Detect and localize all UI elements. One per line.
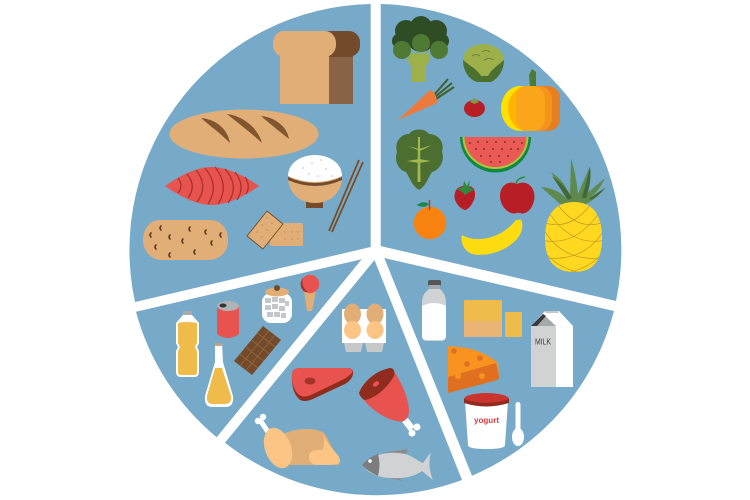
label: yogurt: yogurt — [474, 415, 499, 425]
icon: oil bottle — [176, 311, 199, 377]
icon: cheese wedge — [448, 346, 499, 393]
icon: fish — [362, 449, 433, 481]
label: milk: MILK — [535, 338, 552, 346]
icon: chocolate bar — [234, 326, 281, 375]
icon: baguette — [169, 110, 319, 158]
icon: ham leg — [359, 368, 420, 436]
icon: yogurt cup — [464, 393, 509, 449]
icon: pineapple — [540, 158, 606, 274]
icon: milk carton — [531, 311, 573, 387]
icon: crackers — [247, 211, 303, 249]
panel: sweets and oils segment — [136, 259, 362, 437]
food pie chart infographic — [129, 4, 622, 496]
panel: grains segment — [129, 4, 371, 302]
panel: vegetables and fruit segment — [381, 4, 621, 301]
icon: strawberry — [454, 180, 475, 210]
icon: watermelon slice — [460, 137, 531, 172]
icon: egg carton — [342, 304, 386, 352]
icon: rice bowl — [288, 155, 342, 208]
icon: roast chicken — [255, 414, 340, 472]
icon: cabbage — [463, 44, 504, 82]
icon: milk bottle — [422, 280, 446, 341]
icon: tomato — [464, 98, 485, 117]
icon: ice cream cone — [301, 275, 319, 311]
icon: broccoli — [392, 16, 449, 82]
icon: oil flask — [205, 343, 233, 407]
icon: bread loaf — [273, 31, 360, 104]
icon: sugar jar — [262, 285, 292, 323]
panel: protein segment — [225, 260, 462, 495]
icon: carrot — [398, 79, 454, 120]
icon: pumpkin — [501, 69, 560, 131]
panel: dairy segment — [384, 258, 614, 476]
icon: orange — [414, 200, 446, 239]
icon: steak — [292, 368, 353, 401]
icon: sweet potato — [165, 167, 259, 205]
icon: kale leaf — [396, 130, 443, 190]
icon: soda can — [217, 301, 239, 338]
icon: chopsticks — [329, 160, 363, 232]
icon: cheese blocks — [464, 300, 522, 337]
icon: spoon — [512, 402, 524, 446]
icon: apple — [500, 177, 534, 214]
icon: potato — [143, 220, 228, 260]
icon: banana — [461, 220, 522, 255]
